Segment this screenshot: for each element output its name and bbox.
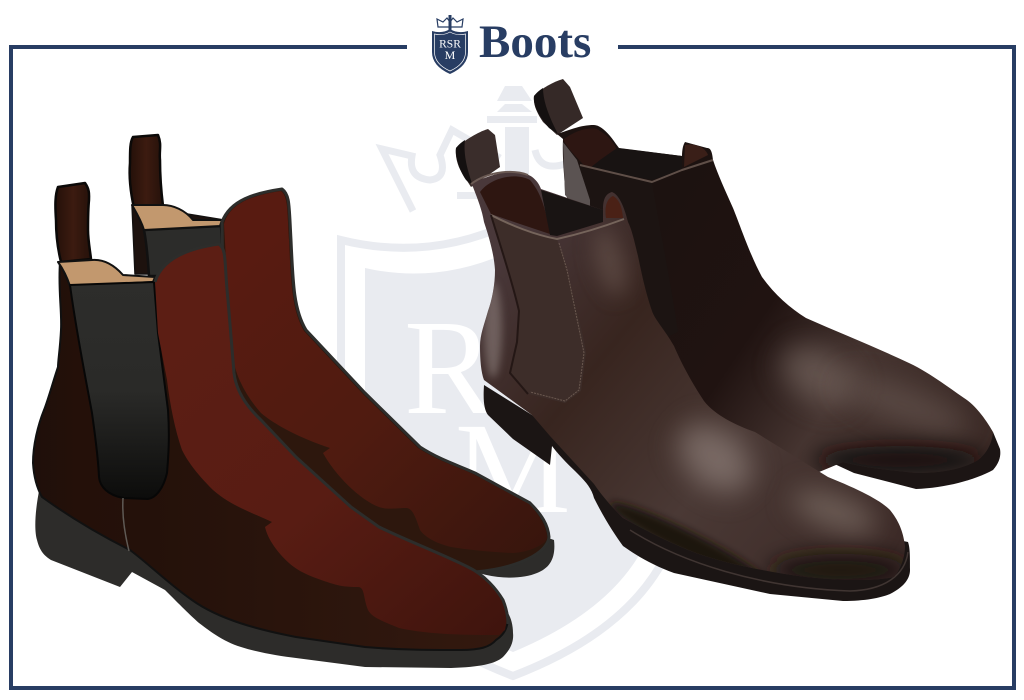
rear leather boot — [534, 79, 1000, 489]
watermark monogram: R — [404, 293, 495, 443]
rear illustrated boot — [130, 135, 554, 578]
icon: crest logo: M — [445, 48, 456, 62]
front leather boot — [456, 129, 910, 601]
heading — [432, 15, 591, 74]
photographic boots — [456, 79, 1000, 601]
title: Boots — [479, 16, 591, 68]
illustrated boots — [33, 135, 554, 668]
watermark monogram: M — [455, 397, 571, 541]
icon: crest logo — [432, 15, 468, 74]
watermark monogram — [404, 293, 571, 541]
icon: crest logo: RSR — [439, 38, 461, 50]
watermark: shield logo — [341, 86, 685, 676]
front illustrated boot — [33, 183, 513, 668]
